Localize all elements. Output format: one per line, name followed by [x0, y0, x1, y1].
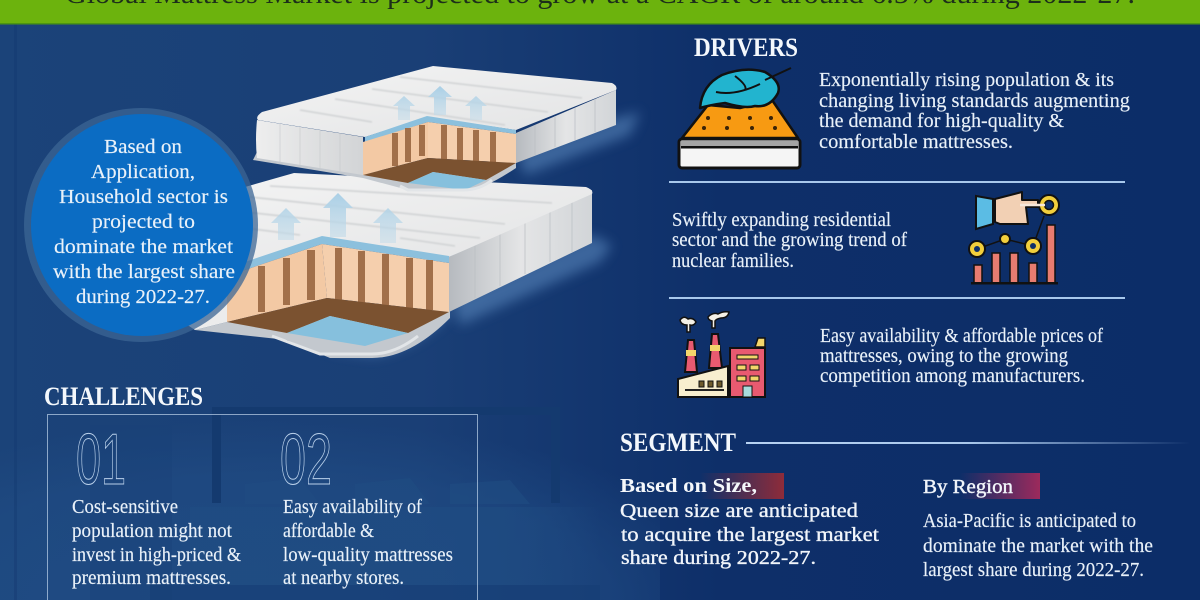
heading: segment: SEGMENT — [620, 428, 736, 457]
segment: based on size — [620, 473, 879, 569]
challenge one: invest in high-priced & — [72, 545, 241, 566]
segment: by region: Asia-Pacific is anticipated to — [923, 511, 1136, 532]
text: driver two: Swiftly expanding residential — [672, 210, 892, 231]
text: driver one: comfortable mattresses. — [819, 132, 1013, 153]
challenge two: low-quality mattresses — [283, 545, 453, 566]
text: driver one: changing living standards augmenting — [819, 91, 1130, 112]
callout: application circle — [24, 108, 258, 342]
challenge one: Cost-sensitive — [72, 497, 178, 518]
challenge two: at nearby stores. — [283, 568, 404, 589]
challenge two: 02 — [280, 420, 332, 500]
callout: application circle: Application, — [91, 161, 195, 183]
callout: application circle: Household sector is — [59, 186, 228, 208]
text: driver three — [820, 326, 1103, 387]
challenge two: Easy availability of — [283, 497, 422, 518]
icon: hand and bar chart — [969, 192, 1059, 284]
illustration: upper mattress — [253, 66, 640, 190]
segment: by region: By Region — [923, 476, 1013, 498]
challenge two — [280, 420, 453, 589]
callout: application circle: with the largest share — [53, 261, 235, 283]
segment: by region: largest share during 2022-27. — [923, 560, 1144, 581]
text: driver three: Easy availability & affordable prices of — [820, 326, 1103, 347]
segment: by region — [923, 473, 1153, 581]
header banner — [0, 0, 1200, 24]
icon: factory — [678, 312, 765, 397]
icon: mattress with feather — [679, 68, 800, 168]
heading: challenges: CHALLENGES — [44, 382, 203, 411]
challenge one: population might not — [72, 521, 233, 542]
challenge one: 01 — [76, 420, 126, 500]
text: driver one — [819, 70, 1130, 153]
text: driver one: the demand for high-quality & — [819, 111, 1064, 132]
segment: based on size: Based on Size, — [620, 475, 757, 497]
callout: application circle: projected to — [92, 211, 195, 233]
text: driver two: sector and the growing trend of — [672, 230, 907, 251]
heading: drivers: DRIVERS — [694, 33, 798, 62]
challenge one: premium mattresses. — [72, 568, 231, 589]
callout: application circle: Based on — [104, 136, 182, 158]
text: driver two — [672, 210, 907, 272]
segment: based on size: Queen size are anticipated — [620, 500, 858, 522]
segment: based on size: share during 2022-27. — [621, 547, 816, 569]
text: driver one: Exponentially rising population & its — [819, 70, 1114, 91]
text: driver three: competition among manufacturers. — [820, 366, 1085, 387]
segment: by region: dominate the market with the — [923, 536, 1153, 557]
challenge two: affordable & — [283, 521, 374, 542]
callout: application circle: dominate the market — [54, 236, 233, 258]
callout: application circle: during 2022-27. — [76, 286, 210, 308]
segment: based on size: to acquire the largest market — [621, 524, 879, 546]
text: driver three: mattresses, owing to the growing — [820, 346, 1068, 367]
panel: challenges — [48, 414, 478, 600]
text: driver two: nuclear families. — [672, 251, 794, 272]
challenge one — [72, 420, 241, 589]
illustration: lower mattress — [150, 173, 612, 358]
